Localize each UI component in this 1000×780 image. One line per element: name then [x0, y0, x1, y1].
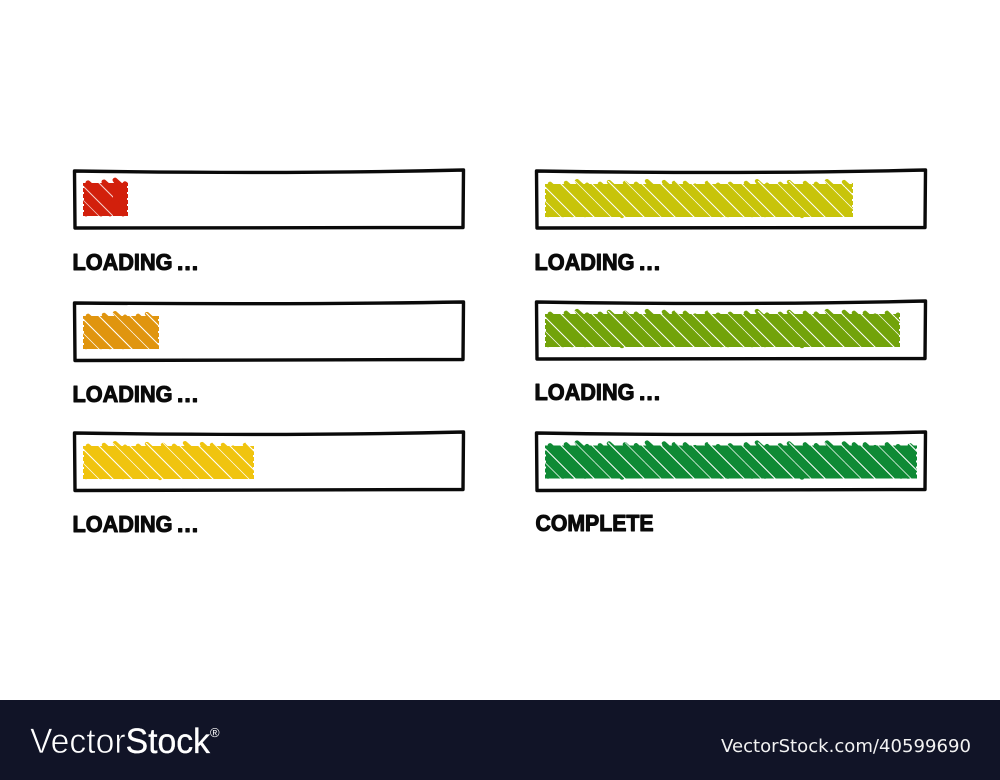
yellow scribble fill	[83, 441, 254, 480]
panel: loading bar red	[72, 168, 466, 270]
label: LOADING	[72, 381, 172, 407]
bar frame	[74, 432, 464, 490]
green scribble fill	[545, 308, 900, 348]
bar frame	[536, 301, 926, 359]
lime scribble fill	[545, 179, 853, 218]
footer band	[0, 700, 1000, 780]
label: LOADING	[534, 379, 634, 405]
label: ...	[639, 379, 661, 405]
orange scribble fill	[83, 311, 159, 350]
bar frame	[536, 170, 926, 228]
bar frame	[74, 302, 464, 360]
panel: loading bar yellow	[72, 430, 466, 532]
label: COMPLETE	[536, 510, 654, 536]
bar frame	[536, 432, 926, 490]
panel: loading bar lime	[534, 168, 928, 270]
panel: loading bar orange	[72, 300, 466, 402]
label: ...	[177, 511, 199, 537]
panel: complete bar dark green	[534, 430, 928, 532]
label: LOADING	[72, 249, 172, 275]
dark green scribble fill	[545, 440, 917, 480]
label: LOADING	[534, 249, 634, 275]
footer image id: VectorStock.com/40599690	[721, 737, 971, 757]
panel: loading bar green	[534, 299, 928, 400]
label: ...	[639, 249, 661, 275]
red scribble fill	[83, 178, 128, 216]
bar frame	[74, 170, 464, 228]
footer logo: VectorStock	[30, 722, 210, 761]
label: ...	[177, 249, 199, 275]
registered mark: ®	[210, 725, 220, 740]
label: ...	[177, 381, 199, 407]
label: LOADING	[72, 511, 172, 537]
